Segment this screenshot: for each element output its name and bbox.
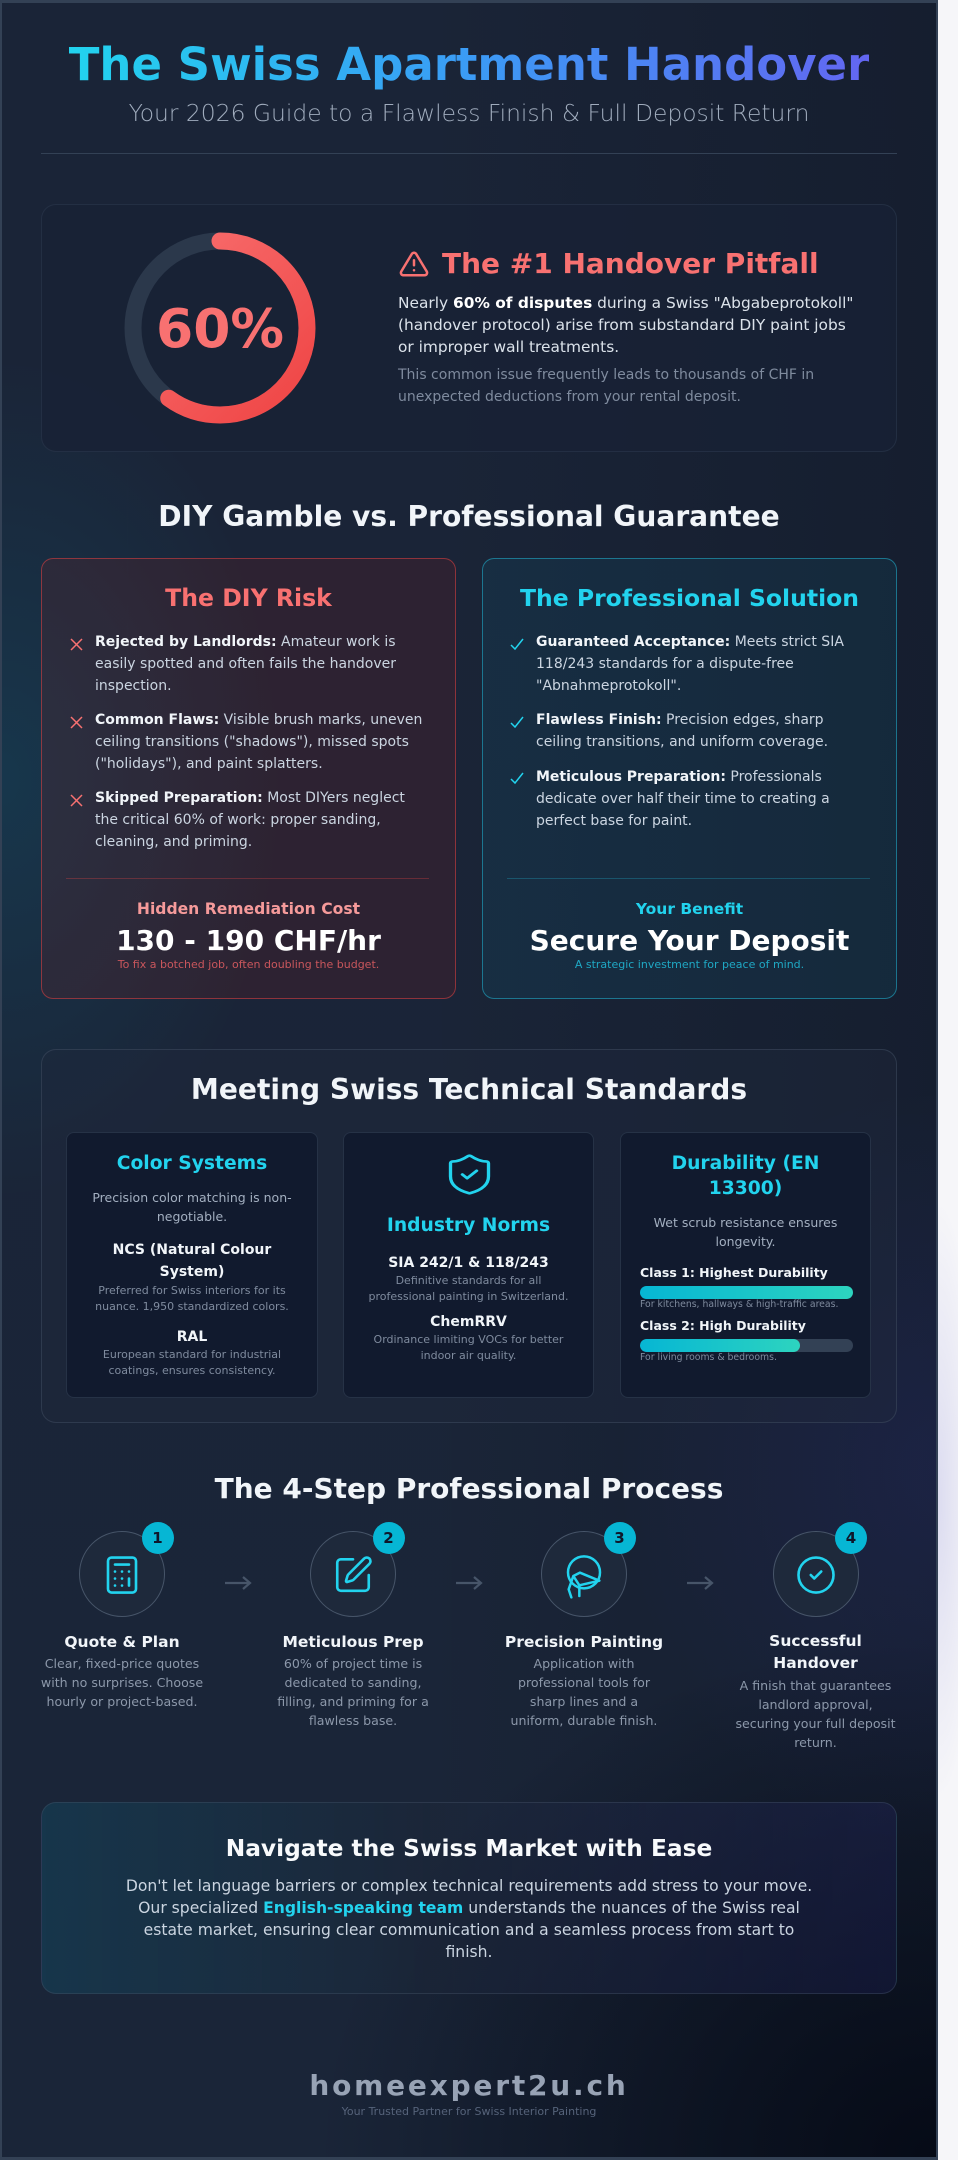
card: durability: Wet scrub resistance ensures [654,1215,837,1230]
chart: 60 percent ring: 60% [156,297,284,360]
step 4: 4 [846,1529,856,1547]
card: color systems: nuance. 1,950 standardized colors. [95,1300,289,1313]
list: professional benefits: dedicate over half their time to creating a [536,790,830,806]
list: DIY risks: cleaning, and priming. [95,834,252,850]
panel: market callout [41,1802,897,1994]
icon: calculator [106,1556,138,1594]
durability class 1: For kitchens, hallways & high-traffic areas. [640,1299,838,1310]
panel: market callout: Navigate the Swiss Market with Ease [226,1835,712,1862]
card: color systems: Precision color matching is non- [92,1190,292,1205]
arrow [225,1576,252,1590]
step 2: dedicated to sanding, [285,1675,421,1690]
card: industry norms: Definitive standards for all [396,1274,541,1287]
step 3: sharp lines and a [530,1694,638,1709]
stat: your benefit: Secure Your Deposit [530,924,849,957]
list: professional benefits: Flawless Finish: Precision edges, sharp [536,712,824,728]
step 4: Successful [769,1632,862,1650]
stat: remediation cost: 130 - 190 CHF/hr [116,924,381,957]
step 2: 60% of project time is [284,1656,422,1671]
list: DIY risks: easily spotted and often fails the handover [95,656,396,672]
arrow [687,1576,714,1590]
durability class 2: Class 2: High Durability [640,1318,806,1333]
card: color systems: negotiable. [157,1209,227,1224]
panel: market callout: Don't let language barriers or complex technical requirements add stress to your move. [126,1877,812,1895]
list: professional benefits: perfect base for paint. [536,812,692,828]
card: industry norms: indoor air quality. [421,1349,516,1362]
card: color systems: NCS (Natural Colour [113,1242,271,1258]
list: DIY risks [70,634,422,850]
step 2: filling, and priming for a [277,1694,429,1709]
card: industry norms: SIA 242/1 & 118/243 [388,1255,549,1271]
text: pitfall body: (handover protocol) arise from substandard DIY paint jobs [398,316,846,334]
list: professional benefits: Meticulous Preparation: Professionals [536,768,822,784]
card: industry norms: ChemRRV [430,1314,507,1330]
icon: shield check [448,1154,490,1195]
text: pitfall body: or improper wall treatments. [398,338,619,356]
list: professional benefits [510,634,844,828]
footer tagline: Your Trusted Partner for Swiss Interior Painting [342,2105,596,2118]
panel: market callout: finish. [445,1943,492,1961]
step 1: hourly or project-based. [47,1694,197,1709]
durability class 1 [640,1265,853,1310]
step 1: 1 [152,1529,163,1547]
panel: market callout: estate market, ensuring clear communication and a seamless process from start to [144,1921,794,1939]
step 1: with no surprises. Choose [41,1675,203,1690]
list: DIY risks: inspection. [95,678,172,694]
step 4: Handover [773,1654,858,1672]
step 4: landlord approval, [758,1697,873,1712]
title: The Swiss Apartment Handover [69,38,869,91]
card: durability: 13300) [709,1178,782,1199]
arrow [456,1576,482,1590]
step 1: Quote & Plan [64,1633,180,1651]
step 3: professional tools for [518,1675,650,1690]
icon: circle check [797,1556,835,1594]
step 4: securing your full deposit [735,1716,896,1731]
heading: technical standards: Meeting Swiss Technical Standards [191,1073,747,1106]
text: pitfall note: unexpected deductions from your rental deposit. [398,389,741,405]
list: DIY risks: ceiling transitions ("shadows"), missed spots [95,734,409,750]
card: industry norms: professional painting in Switzerland. [369,1290,568,1303]
step 1: Clear, fixed-price quotes [45,1656,199,1671]
stat: remediation cost: Hidden Remediation Cost [137,900,360,918]
heading: process: The 4-Step Professional Process [215,1472,723,1505]
list: professional benefits: Guaranteed Acceptance: Meets strict SIA [536,634,844,650]
list: professional benefits: ceiling transitions, and uniform coverage. [536,734,828,750]
card: durability: Durability (EN [672,1153,819,1174]
list: DIY risks: Skipped Preparation: Most DIYers neglect [95,790,405,806]
text: pitfall body [398,294,853,356]
card: color systems: Color Systems [117,1153,267,1174]
step 1 [41,1522,203,1709]
durability class 1: Class 1: Highest Durability [640,1265,828,1280]
step 3: Application with [533,1656,635,1671]
stat: remediation cost [116,900,381,971]
card: industry norms: Industry Norms [387,1215,550,1236]
step 2 [277,1522,429,1728]
stat: your benefit: Your Benefit [636,900,743,918]
card: durability: longevity. [715,1234,776,1249]
list: professional benefits: 118/243 standards for a dispute-free [536,656,794,672]
stat: remediation cost: To fix a botched job, often doubling the budget. [118,958,379,971]
list: professional benefits: "Abnahmeprotokoll". [536,678,681,694]
chart: 60 percent ring [124,232,316,424]
step 3 [505,1522,663,1728]
list: DIY risks: ("holidays"), and paint splatters. [95,756,323,772]
panel: market callout: Our specialized English-speaking team understands the nuances of the Swiss real [138,1899,800,1917]
list: DIY risks: the critical 60% of work: proper sanding, [95,812,381,828]
footer brand: homeexpert2u.ch [309,2069,629,2102]
text: pitfall body: Nearly 60% of disputes during a Swiss "Abgabeprotokoll" [398,294,853,312]
heading: pitfall: The #1 Handover Pitfall [442,247,819,280]
text: pitfall note [398,367,814,405]
card: color systems: European standard for industrial [103,1348,281,1361]
glow on page margin [938,1200,958,1800]
stat: your benefit [530,900,849,971]
panel: pitfall [41,204,897,452]
step 4: return. [794,1735,837,1750]
step 3: uniform, durable finish. [511,1713,657,1728]
durability class 2: For living rooms & bedrooms. [640,1352,777,1363]
card: color systems [66,1132,318,1398]
step 2: flawless base. [309,1713,397,1728]
card: industry norms [343,1132,594,1398]
panel: technical standards [41,1049,897,1423]
list: DIY risks: Rejected by Landlords: Amateur work is [95,634,396,650]
step 3: 3 [614,1529,625,1547]
card: color systems: RAL [177,1329,207,1345]
list: DIY risks: Common Flaws: Visible brush marks, uneven [95,712,422,728]
card: color systems: coatings, ensures consistency. [108,1364,276,1377]
heading: DIY risk: The DIY Risk [165,584,332,612]
card: color systems: System) [160,1264,224,1280]
text: pitfall note: This common issue frequently leads to thousands of CHF in [398,367,814,383]
step 3: Precision Painting [505,1633,663,1651]
heading: comparison: DIY Gamble vs. Professional Guarantee [158,500,780,533]
subtitle: Your 2026 Guide to a Flawless Finish & Full Deposit Return [129,99,809,127]
panel: professional solution [482,558,897,999]
step 4 [735,1522,896,1750]
heading: professional solution: The Professional Solution [520,584,859,612]
step 2: Meticulous Prep [282,1633,424,1651]
icon: pen square [336,1556,372,1592]
durability class 2 [640,1318,853,1363]
stat: your benefit: A strategic investment for peace of mind. [575,958,804,971]
panel: DIY risk [41,558,456,999]
card: color systems: Preferred for Swiss interiors for its [98,1284,286,1297]
icon: paint tool in circle [566,1555,602,1599]
step 2: 2 [383,1529,394,1547]
icon: warning triangle [400,252,428,276]
card: industry norms: Ordinance limiting VOCs for better [374,1333,563,1346]
step 4: A finish that guarantees [740,1678,891,1693]
card: durability [620,1132,871,1398]
